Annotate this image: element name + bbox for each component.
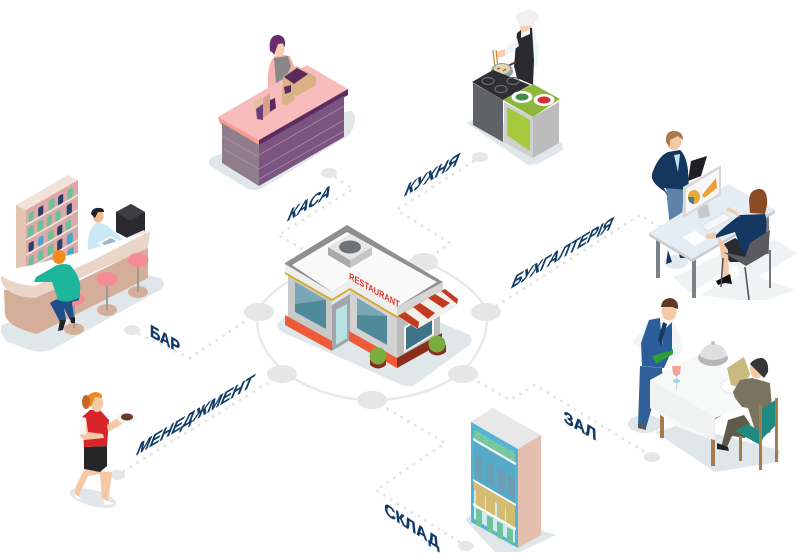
- sign: RESTAURANT: [349, 271, 400, 311]
- left wall: [288, 272, 332, 350]
- front wall: [350, 288, 397, 365]
- illustration: accounting office: [649, 131, 798, 300]
- cashier woman: [268, 35, 308, 92]
- roof vent: [328, 247, 350, 268]
- plates: [512, 91, 532, 103]
- legs: [656, 214, 769, 298]
- illustration: storage fridge: [465, 408, 556, 552]
- illustration: bar counter: [1, 175, 164, 352]
- waiter: [633, 298, 682, 430]
- label: МЕНЕДЖМЕНТ: МЕНЕДЖМЕНТ: [133, 370, 257, 461]
- keyboard and paper: [701, 213, 731, 231]
- seated man: [717, 358, 773, 451]
- chef: [491, 10, 539, 85]
- label: КАСА: КАСА: [284, 180, 335, 227]
- wine glass: [672, 366, 681, 390]
- illustration: kitchen chef: [467, 10, 563, 165]
- illustration: dining hall: [628, 298, 780, 472]
- chair: [735, 398, 778, 470]
- label: СКЛАД: СКЛАД: [383, 498, 440, 553]
- illustration: cashier counter: [209, 35, 355, 190]
- right wall: [397, 290, 440, 362]
- counter: [4, 247, 148, 334]
- connector network: [109, 152, 662, 551]
- table: [660, 403, 737, 466]
- illustration: restaurant building: [278, 225, 472, 386]
- shelves: [473, 430, 516, 544]
- roof: [285, 225, 443, 309]
- monitor: [683, 165, 721, 219]
- label: ЗАЛ: ЗАЛ: [563, 407, 597, 445]
- awning: [398, 290, 458, 329]
- plate and menu: [721, 378, 749, 394]
- plants: [370, 336, 446, 368]
- standing woman: [652, 131, 707, 269]
- illustration: waitress: [68, 392, 137, 512]
- seated woman: [705, 189, 767, 285]
- label: БУХГАЛТЕРІЯ: БУХГАЛТЕРІЯ: [508, 213, 617, 294]
- label: КУХНЯ: КУХНЯ: [401, 148, 463, 202]
- cloche: [698, 341, 728, 366]
- coffee machine: [116, 204, 146, 241]
- till and cards: [283, 66, 316, 96]
- barista: [88, 208, 127, 254]
- chair: [721, 230, 770, 300]
- customer: [34, 250, 80, 331]
- label: БАР: БАР: [150, 321, 180, 358]
- shelf: [16, 175, 78, 287]
- door: [332, 294, 350, 351]
- stools: [64, 253, 148, 335]
